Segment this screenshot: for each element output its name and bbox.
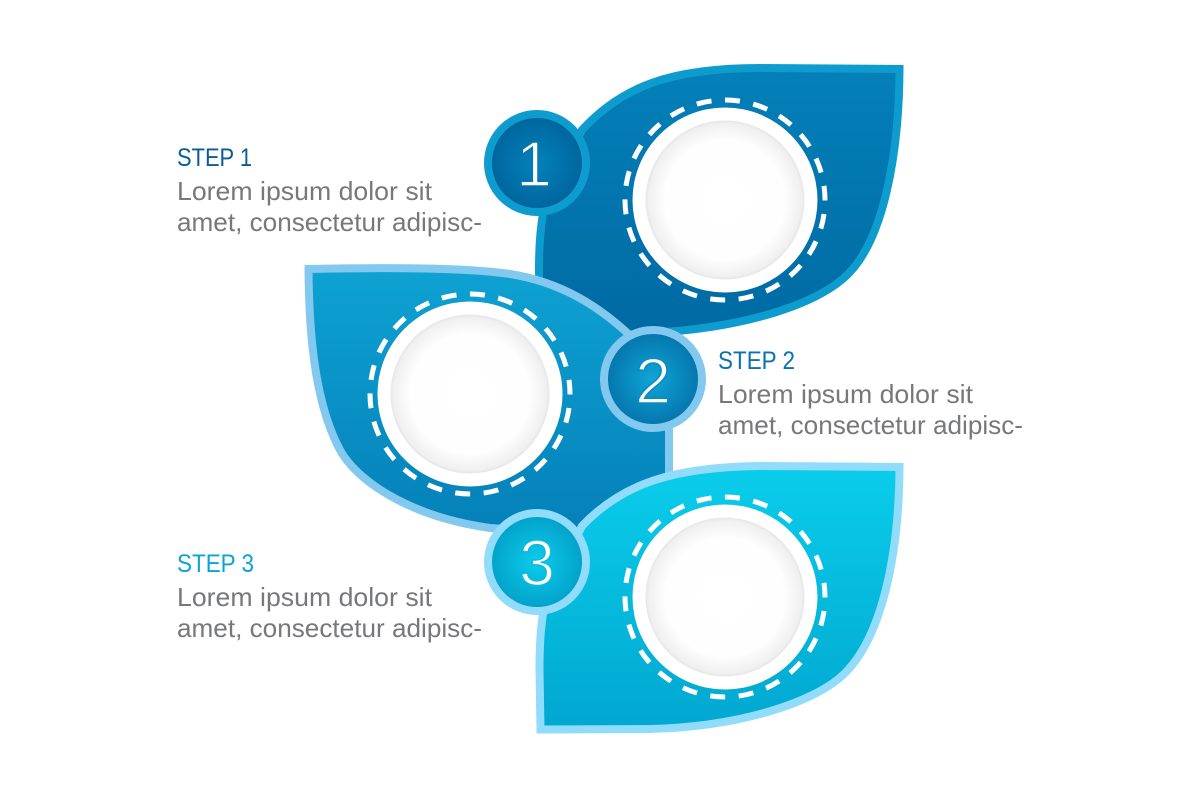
- body: step 1: [177, 176, 482, 237]
- image placeholder 2: [378, 302, 562, 486]
- body: step 2: amet, consectetur adipisc-: [718, 410, 1023, 440]
- heading: step 1: STEP 1: [177, 144, 252, 172]
- number badge 1: [488, 114, 586, 212]
- number badge 3: [488, 513, 586, 611]
- panel: step 2 leaf: [308, 268, 669, 540]
- text block: step 1: [177, 144, 482, 237]
- text block: step 2: [718, 347, 1023, 440]
- image placeholder 3: [632, 504, 818, 690]
- panel: step 1 leaf: [539, 68, 900, 340]
- number badge 1: 1: [516, 128, 552, 200]
- number badge 3: 3: [519, 527, 555, 599]
- leaf shape 3: [540, 466, 900, 730]
- body: step 3: Lorem ipsum dolor sit: [177, 582, 433, 612]
- leaf shape 1: [539, 68, 900, 340]
- number badge 2: [604, 330, 702, 428]
- body: step 1: amet, consectetur adipisc-: [177, 207, 482, 237]
- body: step 2: Lorem ipsum dolor sit: [718, 379, 974, 409]
- panel: step 3 leaf: [540, 466, 900, 730]
- leaf shape 2: [308, 268, 669, 540]
- dashed ring 1: [625, 100, 825, 300]
- image placeholder 1: [632, 108, 818, 292]
- heading: step 3: STEP 3: [177, 550, 254, 578]
- body: step 3: amet, consectetur adipisc-: [177, 613, 482, 643]
- heading: step 2: STEP 2: [718, 347, 795, 375]
- body: step 1: Lorem ipsum dolor sit: [177, 176, 433, 206]
- dashed ring 3: [625, 497, 825, 697]
- body: step 3: [177, 582, 482, 643]
- text block: step 3: [177, 550, 482, 643]
- dashed ring 2: [370, 294, 570, 494]
- number badge 2: 2: [635, 345, 671, 417]
- body: step 2: [718, 379, 1023, 440]
